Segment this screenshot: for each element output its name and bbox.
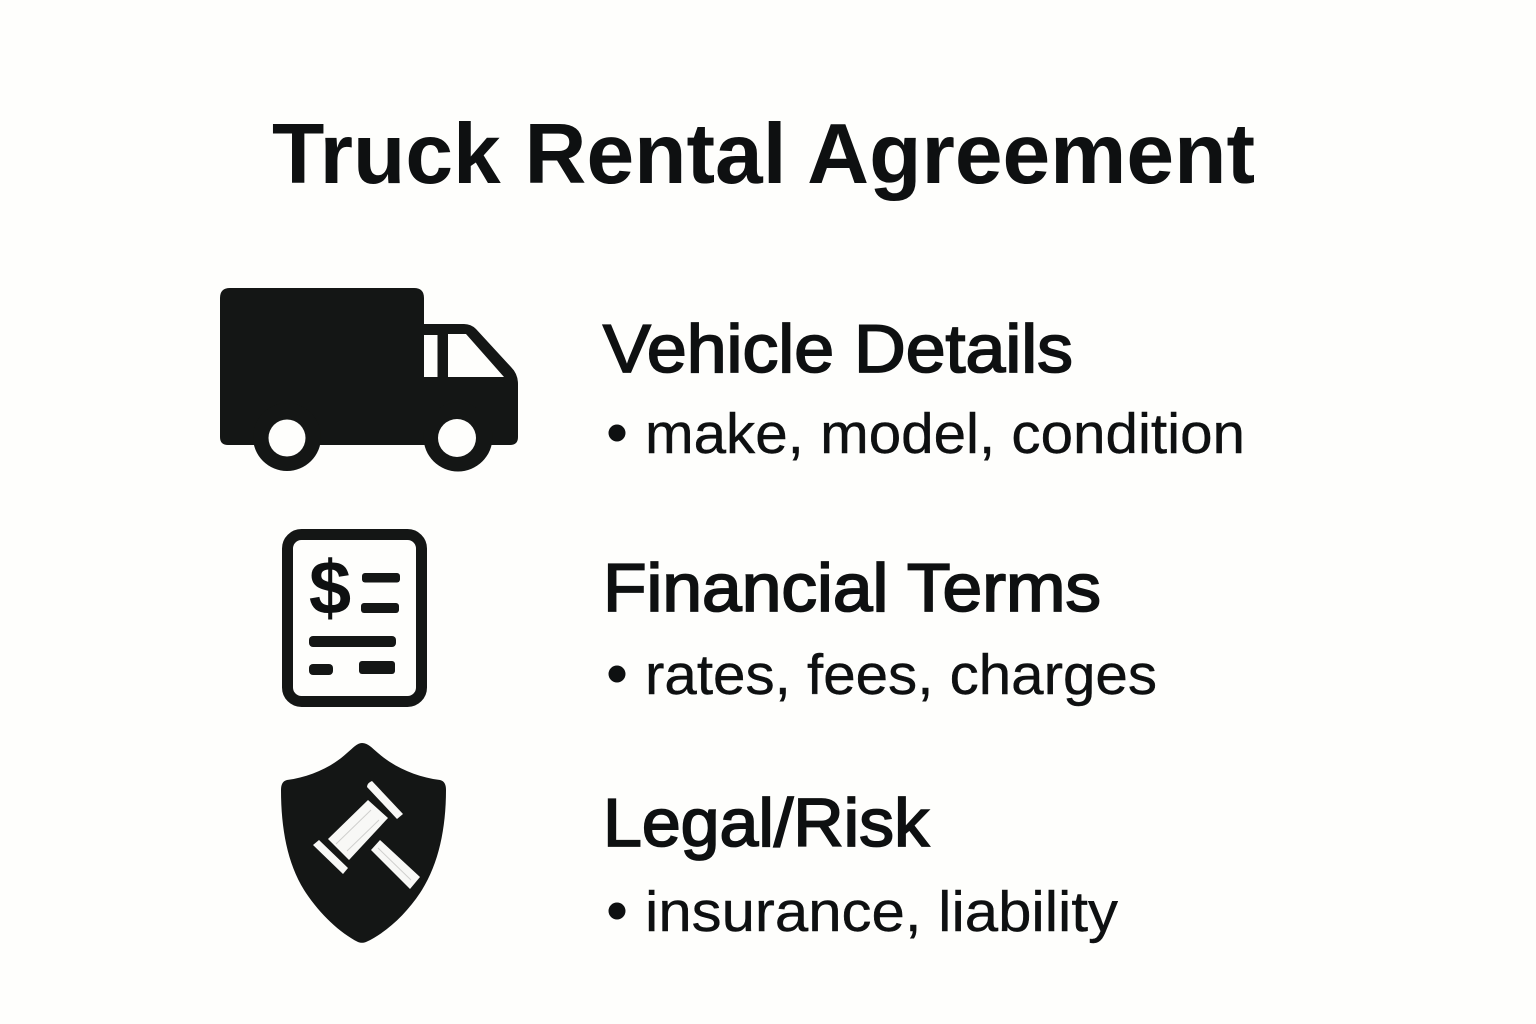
panel: vehicle details <box>603 311 1245 466</box>
panel: financial terms <box>603 550 1157 707</box>
icon: shield with gavel <box>281 743 446 943</box>
heading: vehicle details: Vehicle Details <box>603 311 1073 387</box>
bullet: legal/risk: insurance, liability <box>645 880 1119 944</box>
title: Truck Rental Agreement <box>272 107 1255 202</box>
icon: truck <box>220 288 518 472</box>
bullet: vehicle details: make, model, condition <box>645 402 1245 466</box>
icon: financial document <box>288 534 422 702</box>
icon: dollar sign: $ <box>309 546 351 631</box>
heading: legal/risk: Legal/Risk <box>603 785 930 861</box>
bullet: financial terms: rates, fees, charges <box>645 643 1157 707</box>
heading: financial terms: Financial Terms <box>603 550 1101 626</box>
panel: legal/risk <box>603 785 1119 944</box>
